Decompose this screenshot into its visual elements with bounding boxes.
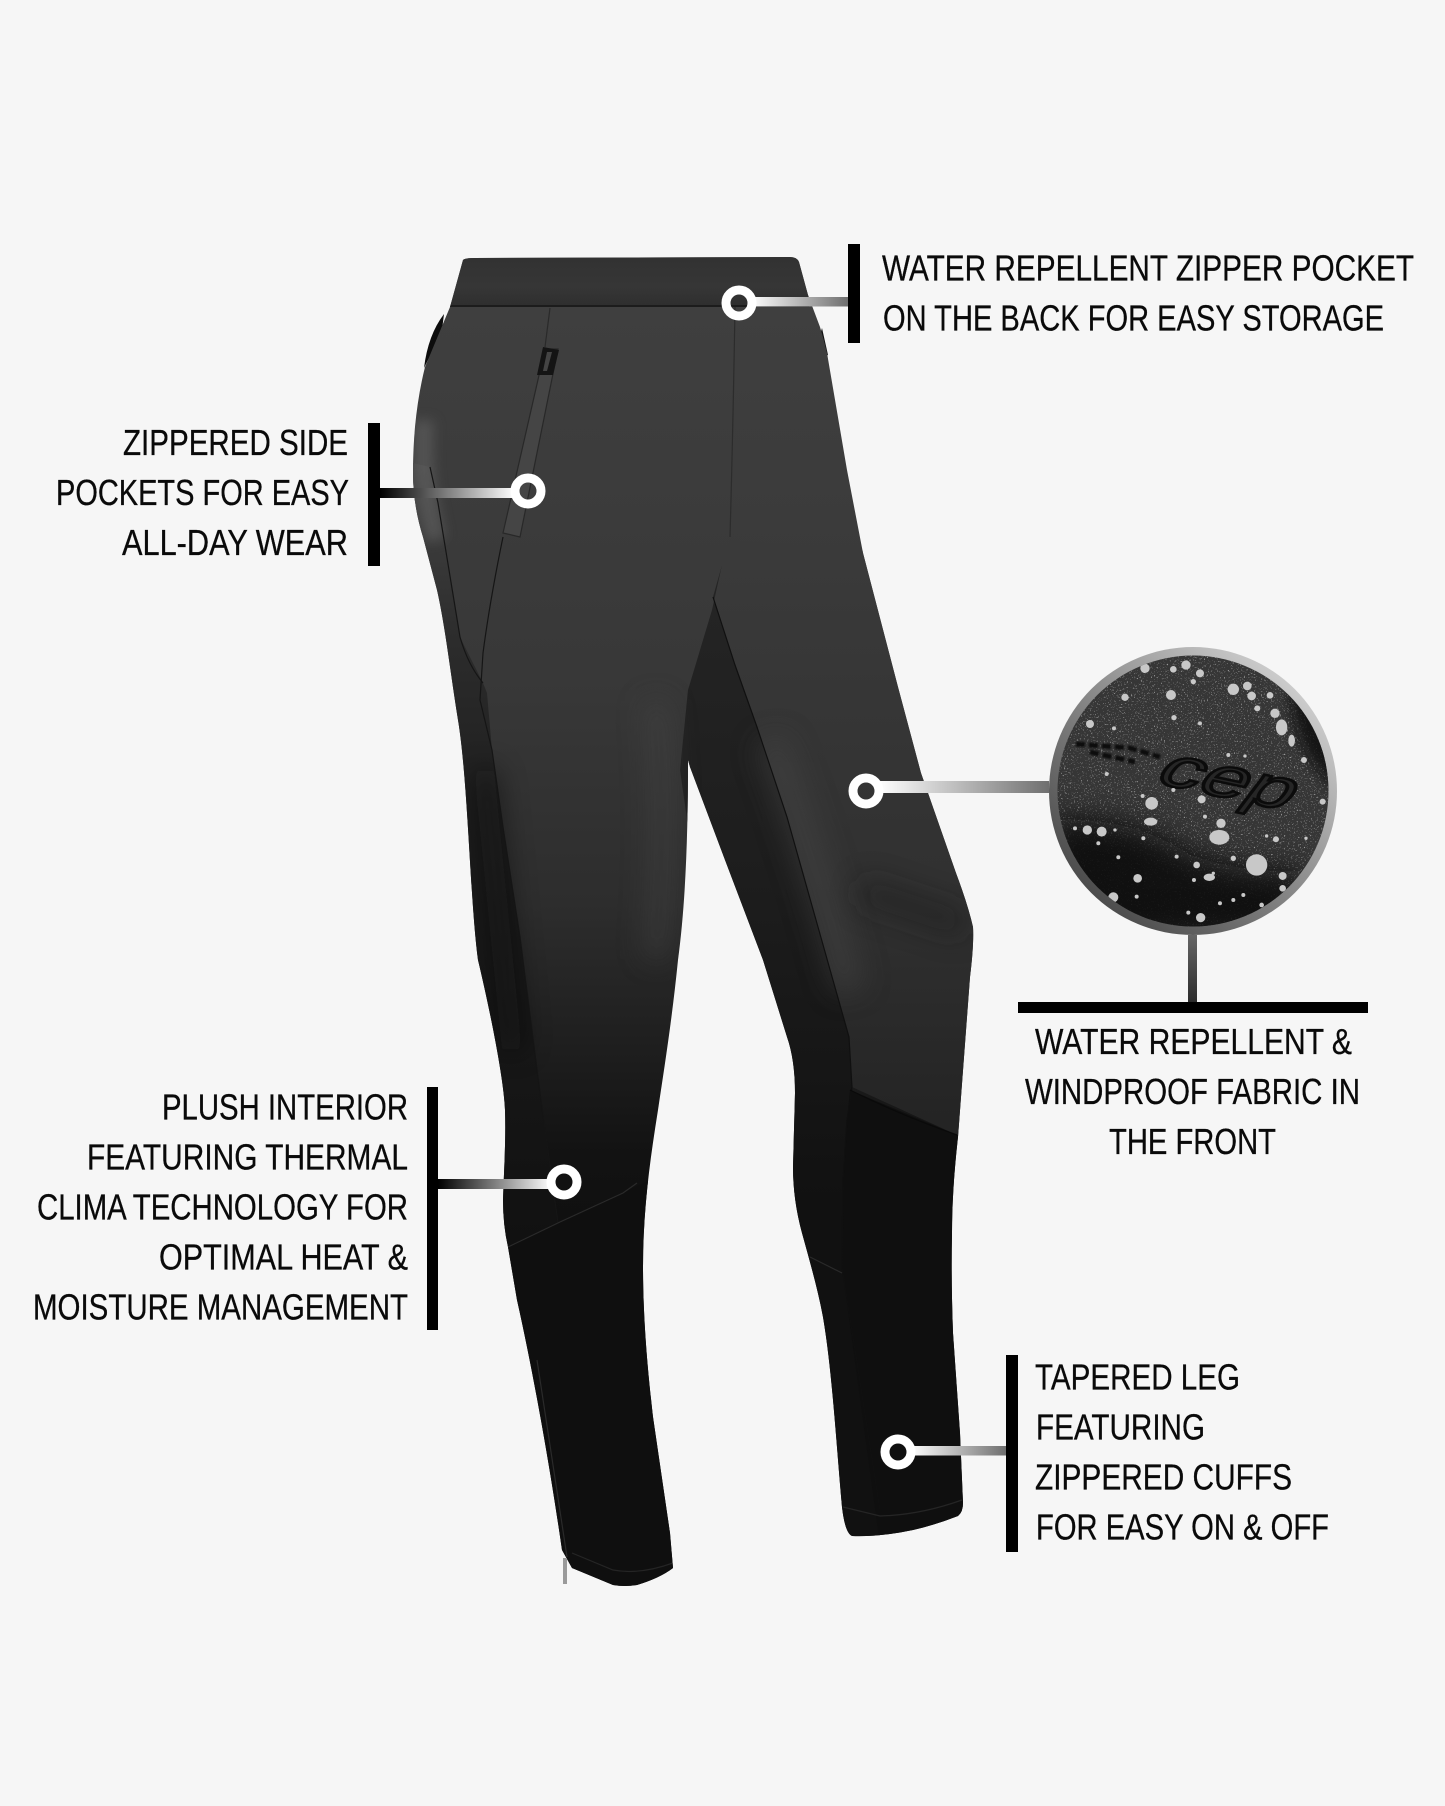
pointer ring (885, 1439, 911, 1465)
bar (368, 423, 380, 566)
lower right leg panel (850, 1092, 963, 1536)
left leg soft highlight (655, 700, 662, 960)
cuff zipper pull (563, 1558, 567, 1584)
fabric swatch circle (1049, 647, 1345, 940)
label text: POCKETS FOR EASY (56, 472, 349, 513)
label text: PLUSH INTERIOR (162, 1086, 408, 1128)
label text: WINDPROOF FABRIC IN (1025, 1071, 1360, 1112)
back side panel (413, 463, 530, 1248)
label text: MOISTURE MANAGEMENT (33, 1286, 408, 1328)
label text: CLIMA TECHNOLOGY FOR (37, 1186, 408, 1228)
light speck grain (1050, 650, 1336, 935)
lower left leg panel (508, 1180, 673, 1586)
label text: TAPERED LEG (1035, 1356, 1240, 1398)
label text (1035, 1356, 1329, 1548)
right leg front panel (842, 550, 974, 1136)
zipper band (503, 349, 558, 537)
callout: zippered side pockets (56, 422, 541, 566)
label text (1025, 1021, 1360, 1162)
pointer ring (853, 778, 879, 804)
label text (33, 1086, 408, 1328)
pants body (400, 250, 990, 1600)
label text: WATER REPELLENT & (1035, 1021, 1352, 1062)
connector line (380, 488, 515, 498)
connector line (878, 781, 1049, 793)
label text: FEATURING (1036, 1406, 1205, 1448)
connector line (438, 1179, 552, 1189)
right leg fold highlight (770, 740, 850, 990)
callout: water repellent and windproof fabric (853, 647, 1368, 1162)
connector line (910, 1446, 1006, 1456)
pointer ring (726, 290, 752, 316)
label text: ZIPPERED CUFFS (1035, 1456, 1292, 1498)
infographic canvas (35, 244, 1414, 1586)
connector stem (1188, 935, 1197, 1002)
label text: OPTIMAL HEAT & (159, 1236, 408, 1278)
bar (1006, 1355, 1018, 1552)
waistband (445, 255, 812, 307)
right leg knee shadow (860, 890, 965, 925)
inner right leg panel (680, 565, 880, 1545)
bar (848, 244, 860, 343)
water droplets (1073, 660, 1326, 922)
pointer ring (551, 1169, 577, 1195)
connector line (750, 297, 848, 306)
hip highlight (423, 420, 436, 540)
bar (1018, 1002, 1368, 1013)
bar (427, 1087, 438, 1330)
label text: ZIPPERED SIDE (123, 422, 348, 463)
embossed brand logo: cep (1144, 735, 1320, 821)
label text (882, 248, 1414, 338)
pants product image (400, 250, 990, 1600)
callout: plush interior (33, 1086, 577, 1330)
zipper pull (537, 347, 559, 375)
seams (430, 306, 962, 1571)
fabric fold shadows (1050, 819, 1300, 940)
front zipper pocket (503, 347, 559, 537)
callout: tapered leg (885, 1355, 1329, 1552)
label text: ALL-DAY WEAR (122, 522, 348, 563)
back zipper nub (820, 328, 828, 356)
side panel deep shadow (496, 775, 512, 882)
swatch texture (1058, 656, 1328, 926)
pointer ring (515, 478, 541, 504)
embossed small lettering (1076, 744, 1160, 762)
swatch border (1049, 647, 1337, 935)
label text: FEATURING THERMAL (87, 1136, 408, 1178)
callout: water repellent zipper pocket on the back (726, 244, 1414, 343)
label text: FOR EASY ON & OFF (1036, 1506, 1329, 1548)
label text (56, 422, 349, 563)
label text: THE FRONT (1109, 1121, 1276, 1162)
back pocket shadow sliver (424, 314, 444, 368)
